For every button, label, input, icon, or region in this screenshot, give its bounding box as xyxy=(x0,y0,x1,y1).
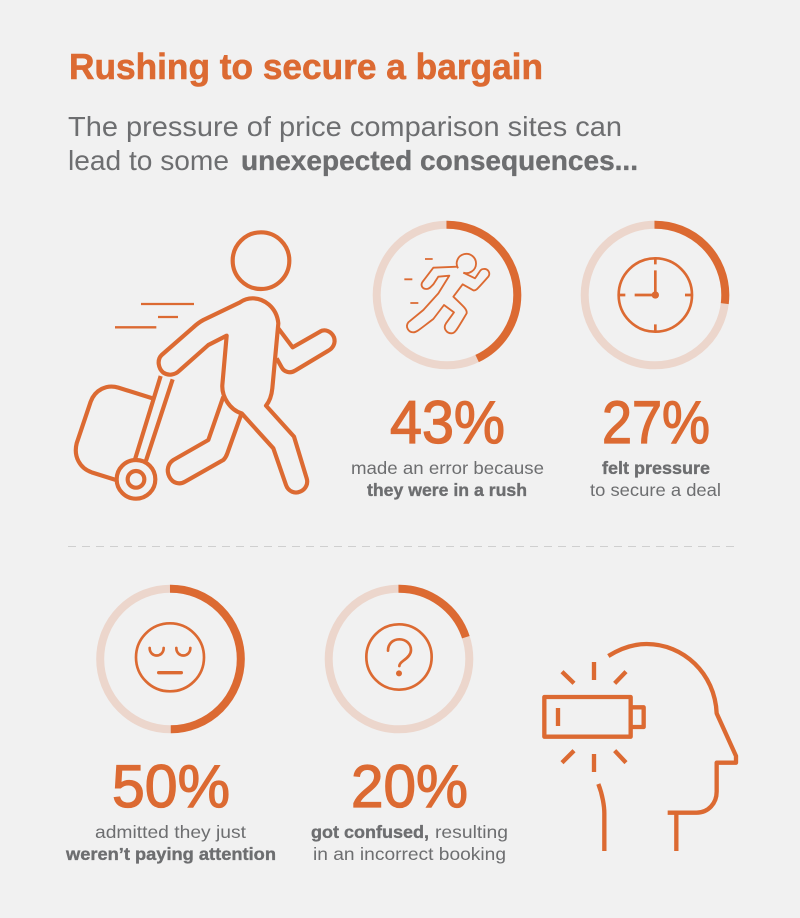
caption: 20% xyxy=(311,822,508,864)
value: 27%: 27% xyxy=(602,389,710,456)
ring: 27% xyxy=(585,225,725,365)
ring: 20% xyxy=(329,589,469,729)
icon: clock xyxy=(618,257,692,332)
stat: 50% xyxy=(65,589,276,864)
caption: 50%: admitted they just xyxy=(95,822,246,842)
subtitle: The pressure of price comparison sites can xyxy=(68,111,622,142)
value: 20%: 20% xyxy=(351,753,468,820)
caption: 43% xyxy=(351,458,544,500)
caption: 20%: in an incorrect booking xyxy=(313,844,506,864)
caption: 20%: resulting xyxy=(435,822,508,842)
caption: 27%: to secure a deal xyxy=(590,480,721,500)
icon: question mark xyxy=(366,624,432,690)
illustration: running traveller with suitcase xyxy=(76,232,335,499)
subtitle: unexepected consequences... xyxy=(241,145,638,176)
caption: 50% xyxy=(65,822,276,864)
value: 50%: 50% xyxy=(112,753,230,820)
stat: 27% xyxy=(585,225,725,500)
caption: 27% xyxy=(590,458,721,500)
stat: 43% xyxy=(351,225,544,500)
icon: tired face xyxy=(136,623,204,691)
ring: 50% xyxy=(100,589,241,729)
subtitle: lead to some xyxy=(68,145,229,176)
caption: 20%: got confused, xyxy=(311,822,429,842)
caption: 43%: they were in a rush xyxy=(367,480,527,500)
icon: runner xyxy=(404,254,489,333)
ring: 43% xyxy=(377,225,517,365)
caption: 43%: made an error because xyxy=(351,458,544,478)
illustration: head with low battery xyxy=(544,644,736,851)
stat: 20% xyxy=(311,589,508,864)
caption: 50%: weren’t paying attention xyxy=(65,844,276,864)
subtitle xyxy=(68,111,638,176)
value: 43%: 43% xyxy=(390,389,505,456)
caption: 27%: felt pressure xyxy=(602,458,710,478)
title: Rushing to secure a bargain xyxy=(69,46,543,87)
